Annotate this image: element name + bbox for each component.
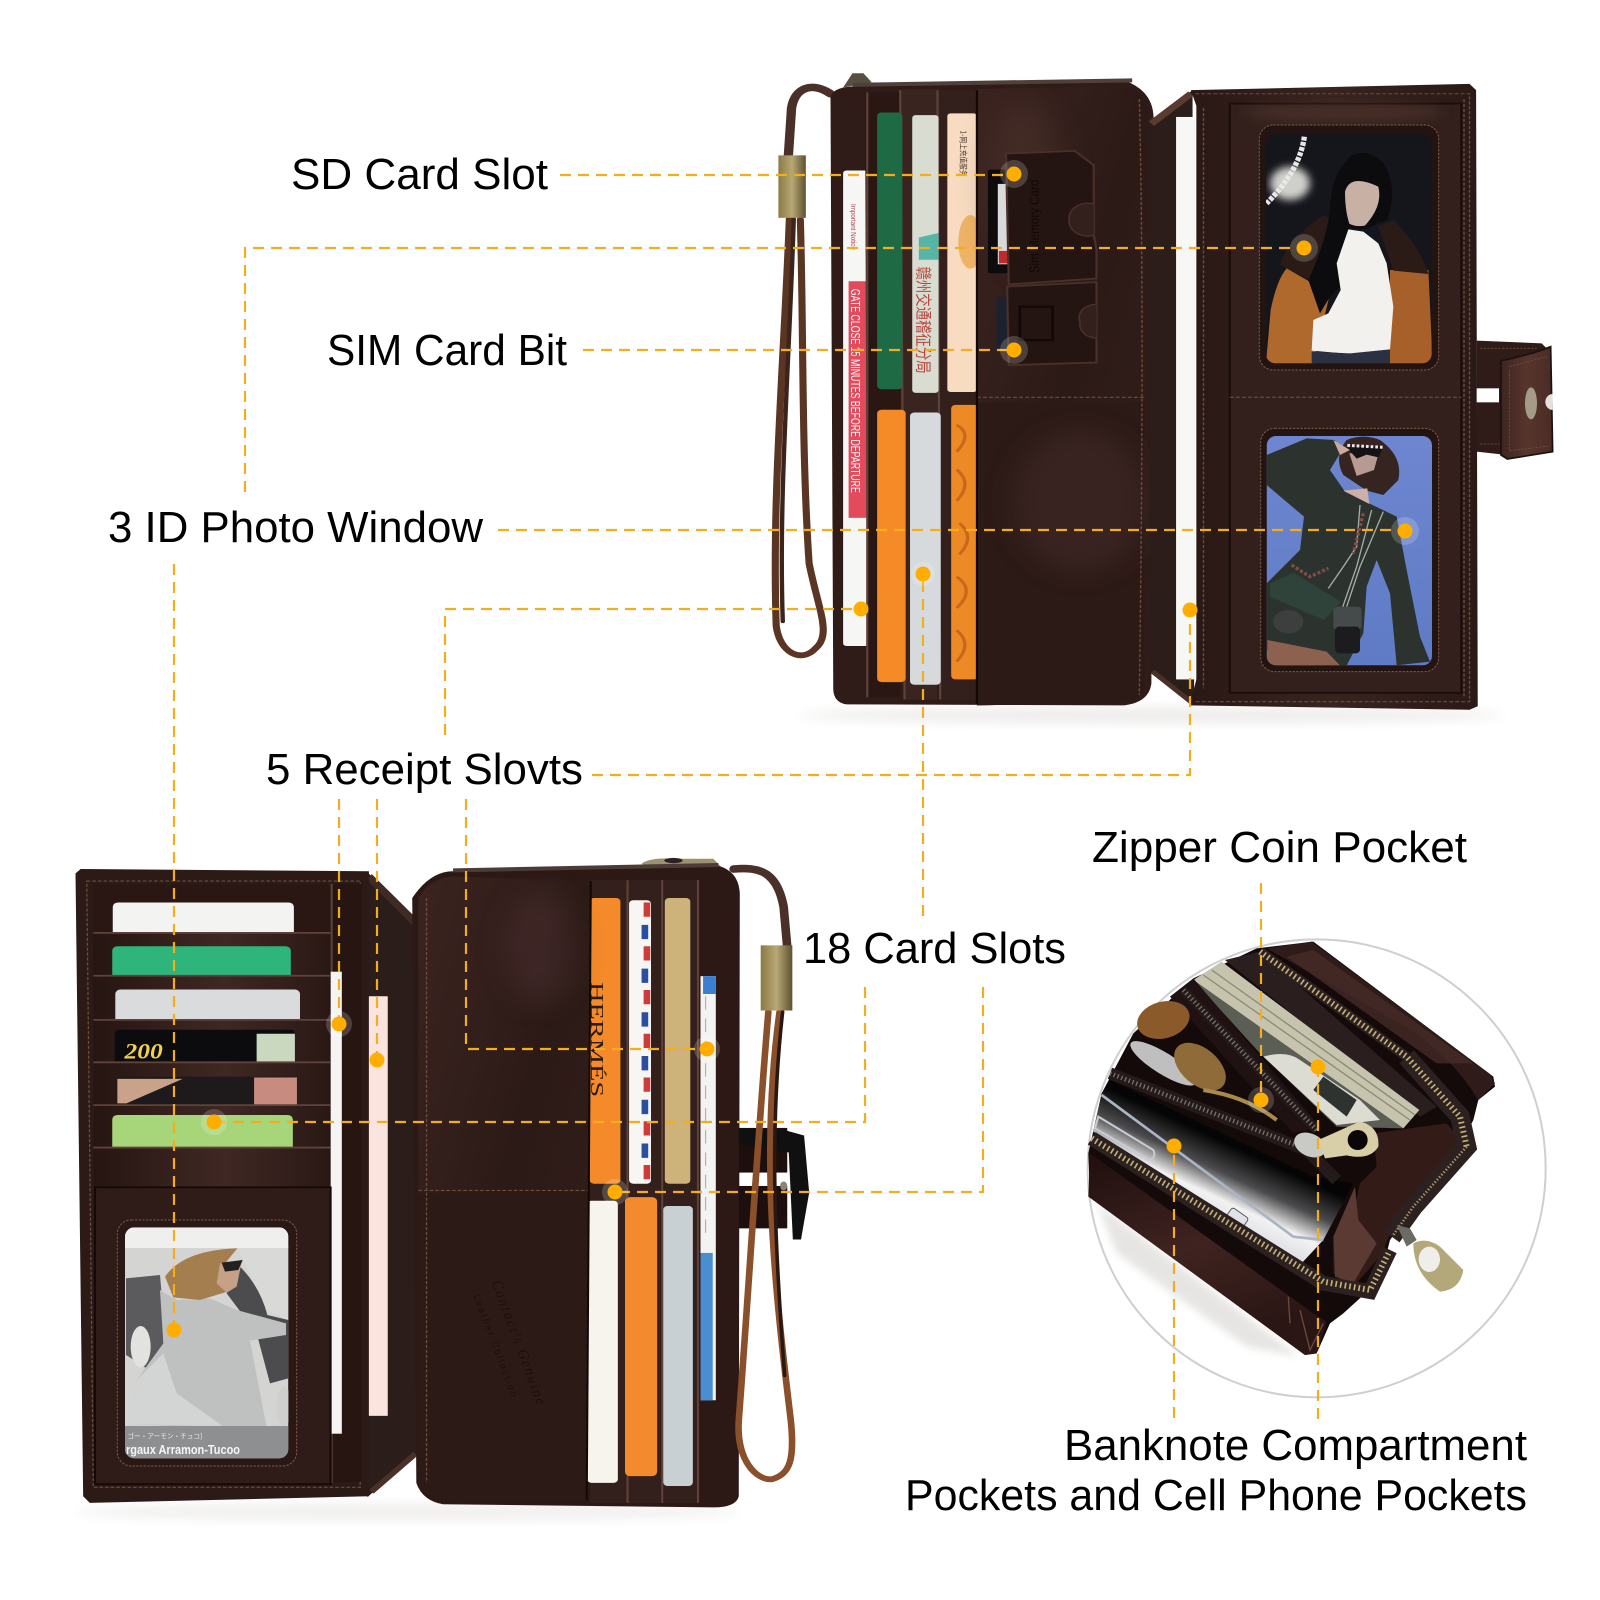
ID window photo: woman in grey coat: rgaux Arramon-Tucoo: [126, 1443, 240, 1457]
tab stitching: [1509, 357, 1550, 452]
shadow under wallet: [1097, 1203, 1300, 1357]
snap notch: [1545, 394, 1553, 410]
receipt slip with boarding notice: Important Notice: [849, 204, 856, 250]
window frame: [1259, 125, 1439, 370]
wallet photo: open wallet, bottom left: [76, 858, 809, 1521]
flap lighter inner: [1333, 1187, 1377, 1283]
upper leather edge: [1267, 942, 1495, 1100]
card: pale with print: [912, 115, 939, 393]
card: orange lower: [625, 1197, 657, 1476]
detail circle: zipper compartments: [1088, 939, 1546, 1397]
phone case edge: [1102, 1095, 1323, 1240]
outer zipper, lower: [1092, 1138, 1390, 1292]
SD card tab: Sim Memory Card: [1026, 180, 1042, 273]
lower leather: [1088, 1153, 1327, 1355]
label: SD Card Slot: SD Card Slot: [291, 150, 548, 199]
card: black 200: [115, 1030, 295, 1065]
wrist strap: [734, 869, 792, 1479]
upper pocket backing: [93, 885, 331, 934]
pocket strip 1: [93, 932, 331, 977]
card: orange HERMES: [587, 898, 620, 1184]
strap slider: [761, 945, 792, 1011]
callout: receipt slot bottom wallet 2: [370, 799, 384, 1068]
banknote face: [1263, 1054, 1380, 1125]
circle outline: [1088, 939, 1546, 1397]
closure tab, top wallet: [1477, 341, 1553, 459]
ID window photo: model on blue background: [1261, 428, 1439, 672]
coin: gold edge: [1203, 1090, 1277, 1120]
blue and white receipt: [701, 976, 716, 1400]
callout: banknote compartment: [1310, 1060, 1326, 1419]
card: airmail: [629, 900, 651, 1184]
card: orange: [877, 410, 906, 682]
closure tab: [739, 1128, 809, 1240]
pocket dividers: [590, 880, 699, 1503]
card: black 200: 200: [123, 1040, 163, 1064]
front tab: [1501, 347, 1553, 459]
card: cream: [587, 1201, 618, 1483]
card: white: [113, 902, 294, 943]
callout: card slots right panel: [602, 987, 983, 1205]
callout: ID window middle: [498, 517, 1419, 545]
white receipt slip: [331, 972, 342, 1434]
callout: receipt slot left of top wallet: [445, 602, 868, 735]
banknotes: [1193, 980, 1403, 1128]
banknote stack layers: [1203, 970, 1415, 1120]
callout lines and dots: [166, 160, 1419, 1419]
zipper pull: [642, 858, 723, 870]
card: orange HERMES: HERMÉS: [587, 982, 607, 1097]
floor shadow: [76, 1503, 739, 1521]
brown flap: [1333, 1123, 1458, 1287]
card: green: [877, 112, 902, 389]
card: silver: [115, 990, 300, 1025]
back strap: [1477, 341, 1548, 455]
front leather panel: Contact's Genuine: [487, 1278, 549, 1407]
card: tan: [665, 898, 690, 1184]
window frame: [1261, 428, 1439, 672]
pocket dividers, left column: [865, 92, 900, 697]
receipt slip with boarding notice: [843, 171, 868, 646]
pocket strip 6: [93, 1147, 331, 1188]
pocket divider rims: [867, 90, 940, 700]
banknote stack edge: [1193, 962, 1419, 1128]
zipper edge: [453, 865, 718, 870]
card: pale with print: 赣州交通稽征分局: [912, 267, 935, 374]
divider leather: [1170, 978, 1320, 1133]
window frame: [117, 1220, 297, 1466]
card: lime: [112, 1115, 293, 1153]
wrist strap: [775, 87, 831, 655]
label: Pockets and Cell Phone Pockets: Pockets and Cell Phone Pockets: [905, 1471, 1527, 1520]
pocket divider rims: [628, 880, 698, 1503]
callout: card slots top wallet: [911, 562, 935, 916]
callout: phone pocket: [1166, 1138, 1182, 1418]
strap gap: [1477, 388, 1499, 402]
floor shadow: [800, 706, 1502, 724]
phone: [1093, 1080, 1353, 1265]
card: grey lower: [663, 1206, 693, 1486]
snap: [1525, 387, 1537, 419]
gusset: [1149, 90, 1194, 705]
receipt slip with boarding notice: GATE CLOSE 15 MINUTES BEFORE DEPARTURE: [847, 289, 861, 493]
highlight on upper leather: [1287, 950, 1473, 1063]
pocket strip 2: [93, 975, 331, 1020]
lower ID pocket: [95, 1187, 331, 1484]
strap slider: [778, 155, 806, 218]
SD label: [998, 184, 1008, 264]
card: photo: [116, 1077, 297, 1110]
label: Banknote Compartment: Banknote Compartment: [1064, 1421, 1527, 1470]
SD red mark: [999, 251, 1008, 263]
phone case band: [1095, 1117, 1154, 1160]
wallet photo: open wallet, top right: [775, 73, 1502, 724]
lining fabric: [1225, 952, 1437, 1117]
SIM stub: [997, 297, 1008, 350]
callout: receipt slot bottom wallet 3: [466, 799, 720, 1062]
outer zipper, upper: [1260, 952, 1467, 1237]
callout: receipt slot gusset of top wallet: [592, 602, 1198, 775]
right leather panel: [1190, 84, 1478, 710]
ID window photo: fashion model in orange jacket: [1259, 125, 1439, 370]
coin: gold: [1165, 1033, 1235, 1100]
camera cut-out: [1224, 1207, 1249, 1230]
SD card stub: [988, 170, 1008, 273]
left leather panel: [76, 869, 369, 1503]
label: 18 Card Slots: 18 Card Slots: [803, 924, 1066, 973]
pocket strip 3: [93, 1019, 331, 1062]
ID window photo: woman in grey coat: [117, 1220, 297, 1466]
card: patterned orange: [951, 405, 979, 679]
ID window photo: woman in grey coat: ゴー・アーモン・チュコ]: [127, 1430, 202, 1440]
callout: SD card slot: [560, 160, 1028, 188]
zipper pull, hanging: [1397, 1225, 1463, 1292]
pocket strip 5: [93, 1105, 331, 1147]
zipper pull, inner: [1290, 1121, 1378, 1162]
label: 5 Receipt Slovts: 5 Receipt Slovts: [266, 745, 583, 794]
wallet body: [412, 866, 740, 1507]
SIM card tab: [1007, 282, 1097, 365]
callout: SIM card bit: [583, 336, 1028, 364]
wallet body: [831, 80, 1154, 705]
card: peach: [947, 113, 982, 392]
zipper edge: [852, 80, 1132, 85]
callout: ID window top: [245, 234, 1318, 492]
card: green: [112, 946, 291, 982]
front leather panel: [418, 877, 591, 1502]
long receipt slot paper: [1176, 117, 1196, 679]
lower corner stitching: [1288, 1297, 1323, 1350]
card: peach: 1-网上充值服务: [957, 130, 969, 177]
front leather panel: [976, 86, 1149, 705]
pink receipt: [368, 996, 388, 1416]
callout: zipper coin pocket: [1248, 883, 1274, 1113]
pocket strip 4: [93, 1062, 331, 1106]
zipper pull stub: [843, 73, 872, 87]
label: SIM Card Bit: SIM Card Bit: [327, 326, 567, 375]
SD card tab: [1006, 151, 1097, 284]
inner zipper, diagonal: [1183, 990, 1317, 1130]
callout: card slots left panel: [201, 987, 865, 1135]
strap stitching: [1480, 348, 1537, 444]
callout: receipt slot bottom wallet 1: [326, 799, 352, 1037]
callout: ID window lower: [166, 564, 182, 1338]
label: 3 ID Photo Window: 3 ID Photo Window: [108, 503, 483, 552]
coin: copper: [1133, 995, 1194, 1045]
card: grey: [910, 412, 941, 685]
banknote dark print: [1313, 1077, 1357, 1117]
label: Zipper Coin Pocket: Zipper Coin Pocket: [1092, 823, 1467, 872]
gusset: [366, 871, 418, 1497]
wallet interior silhouette: [1088, 942, 1495, 1355]
front leather panel: Leather Collection: [470, 1293, 519, 1398]
coin: silver: [1125, 1034, 1201, 1093]
inner zipper, horizontal: [1110, 1073, 1337, 1180]
